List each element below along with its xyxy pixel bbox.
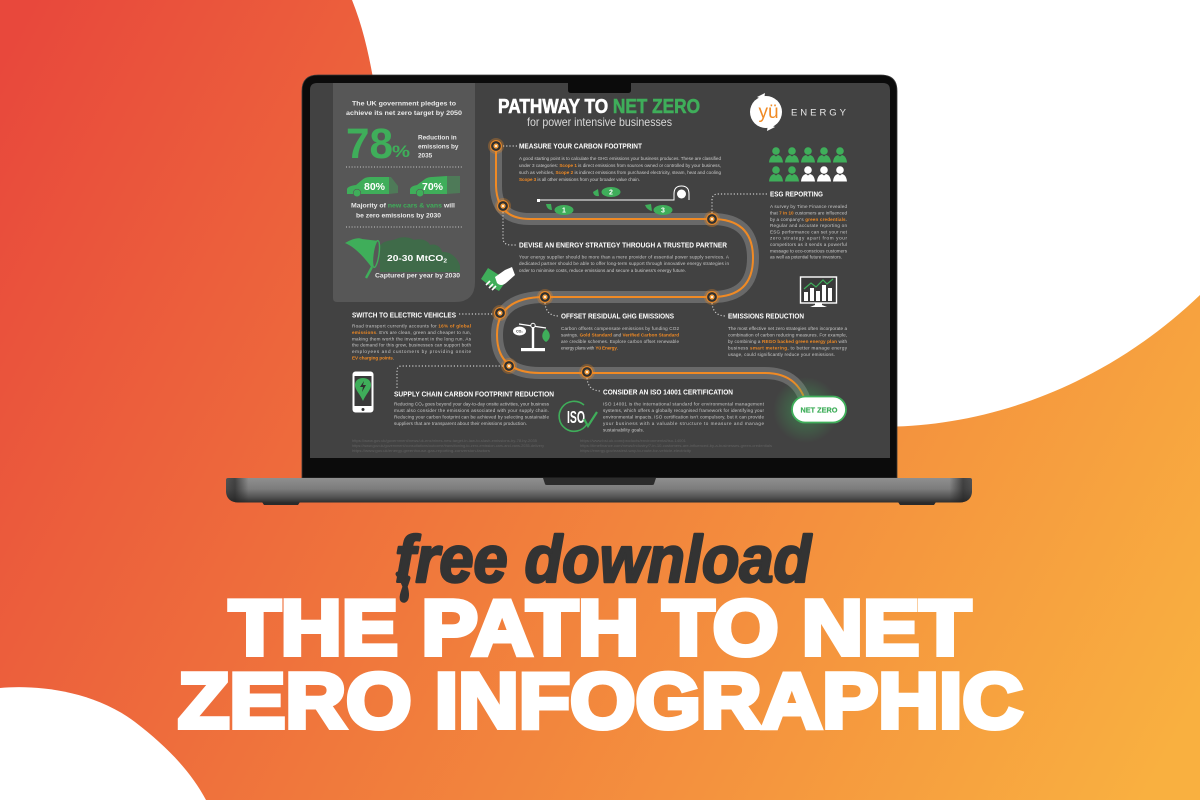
title: pathway to net zero: PATHWAY TO NET ZERO bbox=[498, 96, 700, 118]
section: switch to electric vehicles: the demand for this grow, businesses can support both bbox=[352, 343, 471, 348]
section: esg reporting: A survey by Time Finance revealed bbox=[770, 204, 847, 209]
section: measure your carbon footprint: Scope 3 is all other emissions from your broader value chain. bbox=[519, 177, 640, 182]
section: devise an energy strategy bbox=[519, 242, 730, 273]
icon: scales bbox=[513, 323, 550, 351]
section: offset residual ghg emissions: Carbon offsets compensate emissions by funding CO2 bbox=[561, 326, 679, 331]
icon: van 70 percent bbox=[410, 176, 460, 197]
connector dots bbox=[397, 146, 768, 391]
section: switch to electric vehicles: SWITCH TO ELECTRIC VEHICLES bbox=[352, 312, 456, 320]
section: esg reporting: by a company's green credentials. bbox=[770, 217, 847, 222]
title: pathway to net zero bbox=[498, 96, 700, 129]
logo: yu energy bbox=[750, 93, 847, 131]
main title line 2: ZERO INFOGRAPHIC bbox=[178, 656, 1023, 744]
section: measure your carbon footprint bbox=[519, 144, 721, 182]
net zero badge: NET ZERO bbox=[800, 406, 838, 414]
stat 78 percent: % bbox=[392, 142, 410, 161]
section: esg reporting: zero strategy apart from your bbox=[770, 236, 847, 241]
section: emissions reduction: by combining a REGO backed green energy plan with bbox=[728, 339, 847, 344]
icon: people bbox=[769, 147, 847, 182]
white shape bottom left bbox=[0, 687, 206, 800]
white shape top right bbox=[352, 0, 1200, 427]
section: emissions reduction: combination of carbon reducing measures. For example, bbox=[728, 332, 847, 338]
caption: new cars and vans bbox=[351, 202, 455, 220]
caption: captured per year: Captured per year by 2030 bbox=[375, 272, 460, 280]
section: measure your carbon footprint: such as vehicles, Scope 2 is indirect emissions from purchased electricity, steam, heat and cooling bbox=[519, 170, 721, 175]
section: consider an iso 14001 certification: your business with a valuable structure to measure and manage bbox=[603, 421, 764, 426]
section: emissions reduction bbox=[728, 314, 848, 357]
section: switch to electric vehicles: emissions. EVs are clean, green and cheaper to run, bbox=[352, 330, 471, 335]
icon: van 70 percent: 70% bbox=[422, 182, 443, 193]
section: offset residual ghg emissions: savings. Gold Standard and Verified Carbon Standard bbox=[561, 332, 679, 338]
icon: emission scopes road: 1 bbox=[562, 208, 566, 214]
section: esg reporting: ESG REPORTING bbox=[770, 192, 824, 198]
section: supply chain carbon footprint reduction: suppliers that are transparent about their emissions production. bbox=[394, 421, 527, 426]
footnotes left bbox=[352, 439, 544, 453]
stat 78 percent label: Reduction in bbox=[418, 134, 457, 142]
icon: scales: CO₂ bbox=[516, 330, 523, 334]
section: consider an iso 14001 certification bbox=[603, 390, 765, 432]
icon: carbon cloud bbox=[380, 237, 460, 272]
camera notch bbox=[568, 83, 631, 93]
section: emissions reduction: business smart metering, to better manage energy bbox=[728, 346, 848, 350]
panel heading bbox=[346, 100, 462, 117]
subtitle: for power intensive businesses bbox=[527, 115, 672, 129]
section: offset residual ghg emissions: OFFSET RESIDUAL GHG EMISSIONS bbox=[561, 314, 674, 320]
section: switch to electric vehicles: EV charging points. bbox=[352, 356, 394, 360]
laptop screen bbox=[310, 83, 890, 458]
panel background bbox=[333, 83, 475, 302]
section: consider an iso 14001 certification: sustainability goals. bbox=[603, 428, 644, 432]
icon: iso badge: ISO bbox=[567, 407, 585, 427]
section: switch to electric vehicles bbox=[352, 312, 472, 360]
footnotes right: https://www.bsi.uk.com/products/environmental/iso-14001 bbox=[580, 439, 686, 443]
section: switch to electric vehicles: making them worth the investment in the long run. As bbox=[352, 336, 472, 341]
icon: emission scopes road: 2 bbox=[609, 190, 613, 196]
section: esg reporting bbox=[769, 147, 848, 260]
stat 78 percent label: 2035 bbox=[418, 152, 433, 160]
footnotes right: https://energy.gov/easiest-way-to-route-for-vehicle-electricity bbox=[580, 449, 691, 453]
icon: phone with charging pin bbox=[352, 372, 374, 412]
pathway road bbox=[496, 146, 805, 400]
section: emissions reduction: usage, could significantly reduce your emissions. bbox=[728, 352, 835, 357]
stat: 20-30 MtCO2: 20-30 MtCO bbox=[387, 253, 434, 263]
logo: yu energy: ENERGY bbox=[791, 108, 847, 118]
section: supply chain carbon footprint reduction: must also consider the emissions associated with your supply chain. bbox=[394, 408, 549, 413]
icon: handshake bbox=[481, 267, 515, 291]
net zero badge bbox=[773, 377, 846, 443]
icon: chart monitor bbox=[800, 277, 836, 307]
base end shading bbox=[226, 478, 972, 502]
icon: capture net bbox=[345, 238, 381, 278]
section: consider an iso 14001 certification: ISO 14001 is the international standard for environmental management bbox=[603, 402, 765, 406]
stat 78 percent label: emissions by bbox=[418, 144, 459, 150]
section: supply chain carbon footprint reduction: SUPPLY CHAIN CARBON FOOTPRINT REDUCTION bbox=[394, 392, 554, 398]
stat 78 percent: 78 bbox=[346, 120, 393, 168]
section: emissions reduction: EMISSIONS REDUCTION bbox=[728, 314, 804, 320]
section: esg reporting: ESG performance can set your net bbox=[770, 229, 848, 234]
section: measure your carbon footprint: MEASURE YOUR CARBON FOOTPRINT bbox=[519, 144, 643, 150]
section: devise an energy strategy: Your energy supplier should be more than a mere provider of essential power supply services. A bbox=[519, 254, 730, 260]
section: measure your carbon footprint: under 3 categories: Scope 1 is direct emissions from sources owned or controlled by your business, bbox=[519, 163, 721, 168]
icon: emission scopes road: 3 bbox=[661, 208, 665, 214]
laptop base bbox=[226, 478, 972, 502]
section: switch to electric vehicles: employees and customers by providing onsite bbox=[352, 349, 471, 354]
panel heading: The UK government pledges to bbox=[352, 100, 456, 108]
section: esg reporting: Regular and accurate reporting on bbox=[770, 223, 847, 228]
icon: car 80 percent bbox=[347, 177, 398, 197]
caption: new cars and vans: Majority of new cars & vans will bbox=[351, 202, 455, 210]
section: consider an iso 14001 certification: environmental impacts. ISO certification isn't compulsory, but it can provide bbox=[603, 414, 764, 420]
road track bbox=[496, 146, 805, 400]
logo: yu energy: yü bbox=[758, 102, 779, 123]
panel: UK government pledges bbox=[333, 83, 475, 302]
trackpad notch bbox=[543, 478, 656, 485]
footnotes left: https://www.gov.uk/government/consultations/outcome/transitioning-to-zero-emission-cars-and-vans-2035-delivery bbox=[352, 444, 544, 448]
section: devise an energy strategy: order to minimise costs, reduce emissions and secure a business's energy future. bbox=[519, 268, 686, 273]
route nodes bbox=[488, 138, 720, 380]
stat 78 percent label bbox=[418, 134, 459, 160]
section: emissions reduction: The most effective net zero strategies often incorporate a bbox=[728, 326, 847, 331]
icon: iso badge bbox=[559, 401, 597, 431]
section: esg reporting: message to eco-conscious customers bbox=[770, 248, 848, 253]
section: switch to electric vehicles: Road transport currently accounts for 16% of global bbox=[352, 324, 471, 328]
section: consider an iso 14001 certification: systems, which offers a globally recognised framework for identifying your bbox=[603, 408, 764, 413]
road centre line bbox=[496, 146, 805, 400]
section: supply chain carbon footprint reduction: Reducing CO₂ goes beyond your day-to-day onsite activities, your business bbox=[394, 402, 550, 406]
section: offset residual ghg emissions: energy plans with Yü Energy. bbox=[561, 346, 618, 350]
laptop bbox=[226, 75, 972, 505]
laptop lid bbox=[302, 75, 897, 478]
footnotes left: https://www.gov.uk/energy-greenhouse-gas-reporting-conversion-factors bbox=[352, 449, 490, 453]
section: esg reporting: that 7 in 10 customers are influenced bbox=[770, 210, 847, 216]
section: supply chain carbon footprint reduction: Reducing your carbon footprint can be achieved by selecting sustainable bbox=[394, 414, 549, 420]
caption: new cars and vans: be zero emissions by 2030 bbox=[356, 212, 441, 220]
section: measure your carbon footprint: A good starting point is to calculate the GHG emissions your business produces. These are classified bbox=[519, 156, 721, 161]
footnotes left: https://www.gov.uk/government/news/uk-enshrines-new-target-in-law-to-slash-emissions-by-78-by-2035 bbox=[352, 439, 537, 443]
laptop feet bbox=[262, 502, 936, 505]
script heading: free download: free download bbox=[395, 522, 813, 596]
stat: 20-30 MtCO2: 2 bbox=[443, 258, 447, 264]
main title line 1: THE PATH TO NET bbox=[229, 584, 971, 672]
footnotes right: https://timefinance.com/news/industry/7-in-10-customers-are-influenced-by-a-businesses-green-credentials bbox=[580, 444, 772, 448]
section: supply chain carbon footprint reduction bbox=[394, 392, 554, 426]
section: devise an energy strategy: DEVISE AN ENERGY STRATEGY THROUGH A TRUSTED PARTNER bbox=[519, 242, 727, 250]
section: consider an iso 14001 certification: CONSIDER AN ISO 14001 CERTIFICATION bbox=[603, 390, 733, 396]
section: esg reporting: as well as potential future investors. bbox=[770, 255, 842, 260]
panel heading: achieve its net zero target by 2050 bbox=[346, 110, 462, 117]
footnotes right bbox=[580, 439, 772, 453]
section: esg reporting: competitors as it sends a powerful bbox=[770, 242, 847, 247]
icon: emission scopes road bbox=[537, 186, 689, 215]
section: devise an energy strategy: dedicated partner should be able to offer long-term support through innovative energy strategies in bbox=[519, 261, 729, 266]
section: offset residual ghg emissions bbox=[561, 314, 679, 350]
section: offset residual ghg emissions: are credible schemes. Explore carbon offset renewable bbox=[561, 339, 679, 344]
icon: car 80 percent: 80% bbox=[364, 182, 385, 193]
